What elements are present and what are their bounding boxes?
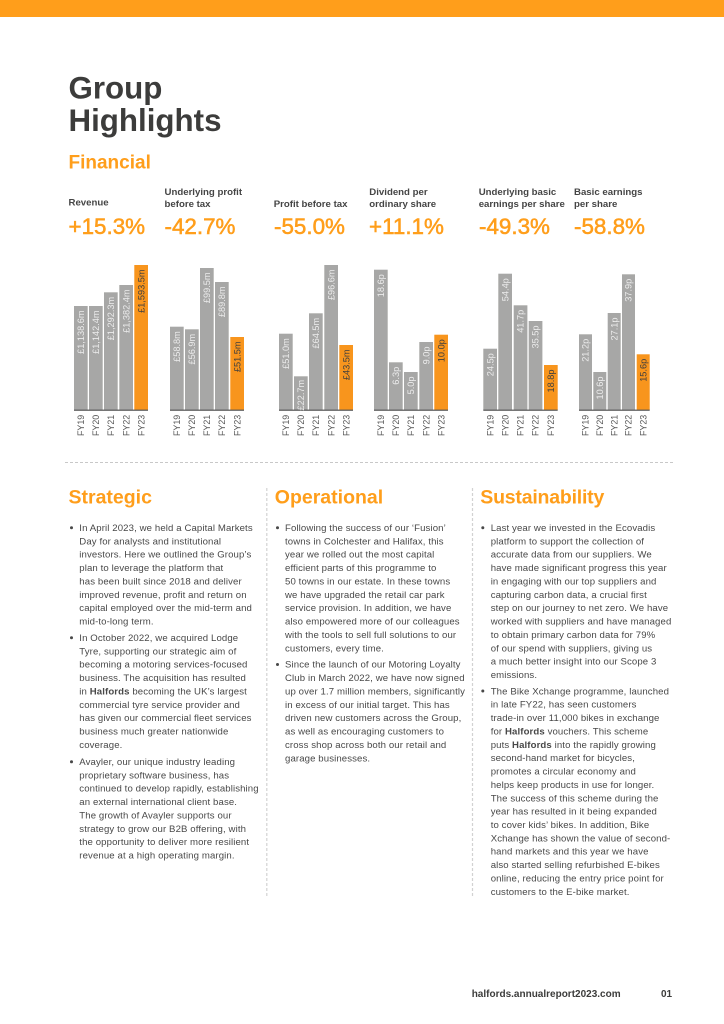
bullet: Ecovadis: accurate data from our suppliers. We <box>491 550 652 561</box>
footer URL: halfords.annualreport2023.com <box>472 989 621 1000</box>
bullet: Capital Markets Day <box>70 523 253 628</box>
metric: Revenue: Revenue <box>68 198 109 209</box>
bullet: Avayler: revenue at a high operating margin. <box>79 851 235 862</box>
bullet: Lodge Tyre: in Halfords becoming the UK’s largest <box>79 686 247 697</box>
bar chart: Dividend per ordinary share: 5.0p <box>406 376 416 394</box>
metric: Underlying basic earnings per share: -49.3% <box>479 214 550 239</box>
bar chart: Underlying profit before tax: FY19 <box>172 415 182 436</box>
bullet: Ecovadis: Last year we invested in the Ecovadis <box>491 523 655 534</box>
bullet: Fusion towns: 50 towns in our estate. In these towns <box>285 576 450 587</box>
metric: Underlying basic earnings per share: earnings per share <box>479 199 565 210</box>
bullet: Bike Xchange: trade-in over 11,000 bikes in exchange <box>491 713 660 724</box>
bar chart: Underlying profit before tax: FY23 <box>232 415 242 436</box>
bullet: Bike Xchange <box>481 686 670 898</box>
bar chart: Underlying basic earnings per share: 24.5p <box>485 353 495 376</box>
bullet: Bike Xchange: helps keep products in use for longer. <box>491 780 654 791</box>
bullet: Bike Xchange: The success of this scheme during the <box>491 793 658 804</box>
bullet: Lodge Tyre: has given our commercial fleet services <box>79 713 252 724</box>
bar chart: Dividend per ordinary share: FY20 <box>391 415 401 436</box>
bar chart: Underlying basic earnings per share: FY23 <box>546 415 556 436</box>
bullet: Fusion towns: customers, every time. <box>285 643 384 654</box>
bar chart: Revenue: FY20 <box>91 415 101 436</box>
bullet: Lodge Tyre: becoming a motoring services-focused <box>79 660 248 671</box>
bullet: Ecovadis: step on our journey to net zero. We have <box>491 603 668 614</box>
bullet: Fusion towns: service provision. In addition, we have <box>285 603 451 614</box>
bullet: Bike Xchange: hand markets and this year we have <box>491 847 649 858</box>
bullet: Ecovadis: a much better insight into our Scope 3 <box>491 657 656 668</box>
bullet: Avayler: the opportunity to deliver more resilient <box>79 837 249 848</box>
bar chart: Basic earnings per share: 27.1p <box>609 318 619 340</box>
bar chart: Profit before tax: FY22 <box>326 415 336 436</box>
bullet: Bike Xchange: second-hand market for bicycles, <box>491 753 635 764</box>
metric: Revenue: +15.3% <box>68 214 145 239</box>
bullet: Ecovadis: in engaging with our top suppliers and <box>491 576 656 587</box>
bullet: Bike Xchange: also started selling refurbished E-bikes <box>491 860 660 871</box>
heading: Sustainability: Sustainability <box>480 486 604 508</box>
bullet: Bike Xchange: online, reducing the entry price point for <box>491 873 665 884</box>
bullet: Fusion towns: towns in Colchester and Halifax, this <box>285 536 444 547</box>
bullet: Ecovadis: have made significant progress this year <box>491 563 668 574</box>
bar chart: Underlying basic earnings per share: FY19 <box>485 415 495 436</box>
title: Highlights <box>68 103 222 138</box>
bullet: Ecovadis: to obtain primary carbon data for 79% <box>491 630 656 641</box>
page number: 01 <box>661 989 673 1000</box>
bar chart: Underlying basic earnings per share: FY21 <box>516 415 526 436</box>
bullet: Avayler: an external international client base. <box>79 797 237 808</box>
bar chart: Basic earnings per share: FY20 <box>595 415 605 436</box>
metric: Profit before tax: -55.0% <box>274 214 345 239</box>
bullet: Ecovadis: emissions. <box>491 670 537 681</box>
bullet: Motoring Loyalty Club: up over 1.7 million members, significantly <box>285 686 465 697</box>
metric: Underlying profit before tax: -42.7% <box>164 214 236 239</box>
bar chart: Profit before tax: FY23 <box>341 415 351 436</box>
bullet: Ecovadis: capturing carbon data, a crucial first <box>491 590 647 601</box>
bullet: Lodge Tyre: coverage. <box>79 740 122 751</box>
bar chart: Revenue: £1,292.3m <box>106 296 116 340</box>
bullet: Bike Xchange: year has resulted in it being expanded <box>491 807 657 818</box>
bar chart: Profit before tax: FY21 <box>311 415 321 436</box>
bullet: Motoring Loyalty Club: cross shop across both our retail and <box>285 740 446 751</box>
bar chart: Underlying profit before tax: FY20 <box>187 415 197 436</box>
bar chart: Revenue: £1,593.5m <box>136 269 146 313</box>
bar chart: Dividend per ordinary share: 10.0p <box>436 339 446 362</box>
bullet: Motoring Loyalty Club: Club in March 2022, we have now signed <box>285 673 465 684</box>
bar chart: Basic earnings per share <box>579 274 650 436</box>
bar chart: Profit before tax: £96.6m <box>326 269 336 300</box>
bullet: Capital Markets Day: capital employed over the mid-term and <box>79 603 252 614</box>
bullet: Capital Markets Day: mid-to-long term. <box>79 617 154 628</box>
panel: Operational <box>275 486 465 764</box>
bullet: Bike Xchange: to cover kids’ bikes. In addition, Bike <box>491 820 649 831</box>
bar chart: Basic earnings per share: 21.2p <box>581 339 591 362</box>
metric: Basic earnings per share: -58.8% <box>574 214 645 239</box>
bullet: Motoring Loyalty Club <box>276 660 465 764</box>
bar chart: Revenue: FY21 <box>106 415 116 436</box>
bullet: Lodge Tyre: commercial tyre service provider and <box>79 700 240 711</box>
bar chart: Dividend per ordinary share <box>374 270 448 436</box>
bar chart: Underlying basic earnings per share: 35.5p <box>531 326 541 348</box>
bullet: Fusion towns: efficient parts of this programme to <box>285 563 436 574</box>
bullet: Fusion towns <box>276 523 460 654</box>
bar chart: Basic earnings per share: FY19 <box>581 415 591 436</box>
bullet: Capital Markets Day: plan to leverage the platform that <box>79 563 224 574</box>
title: Group <box>68 70 162 106</box>
bullet: Bike Xchange: promotes a circular economy and <box>491 767 636 778</box>
bar chart: Revenue: £1,138.6m <box>76 310 86 354</box>
bullet: Avayler <box>70 757 259 862</box>
metric: Profit before tax: Profit before tax <box>274 199 348 210</box>
bullet: Lodge Tyre: In October 2022, we acquired Lodge <box>79 633 238 644</box>
bar chart: Underlying profit before tax: £56.9m <box>187 333 197 364</box>
bullet: Capital Markets Day: has been built since 2018 and deliver <box>79 576 242 587</box>
bullet: Fusion towns: Following the success of our ‘Fusion’ <box>285 523 446 534</box>
bullet: Ecovadis <box>481 523 671 681</box>
panel: Sustainability <box>480 486 671 898</box>
metric: Dividend per ordinary share: ordinary share <box>369 199 437 210</box>
top orange band <box>0 0 724 17</box>
bar chart: Dividend per ordinary share: FY21 <box>406 415 416 436</box>
bar chart: Underlying basic earnings per share: 54.4p <box>500 278 510 301</box>
bullet: Ecovadis: worked with suppliers and have managed <box>490 617 671 628</box>
bar chart: Underlying profit before tax: FY22 <box>217 415 227 436</box>
bullet: Lodge Tyre: business much greater nationwide <box>79 727 228 738</box>
bar chart: Underlying basic earnings per share: FY22 <box>531 415 541 436</box>
bar chart: Profit before tax <box>279 265 353 436</box>
bar chart: Underlying basic earnings per share: 41.7p <box>516 310 526 333</box>
bar chart: Dividend per ordinary share: 9.0p <box>421 346 431 364</box>
heading: Operational: Operational <box>275 486 383 508</box>
bar chart: Basic earnings per share: FY22 <box>624 415 634 436</box>
bullet: Ecovadis: platform to support the collection of <box>491 536 644 547</box>
bar chart: Underlying profit before tax: £89.8m <box>217 286 227 317</box>
metric: Basic earnings per share: per share <box>574 199 618 210</box>
bar chart: Revenue: FY22 <box>121 415 131 436</box>
bullet: Capital Markets Day: Day for analysts and institutional <box>79 536 221 547</box>
bar chart: Basic earnings per share: 10.6p <box>595 376 605 400</box>
bullet: Bike Xchange: Xchange has shown the value of second- <box>491 833 670 844</box>
bullet: Bike Xchange: The Bike Xchange programme, launched <box>491 686 669 697</box>
metric: Profit before tax <box>274 199 348 239</box>
heading: Financial: Financial <box>68 153 151 174</box>
bar chart: Basic earnings per share: 37.9p <box>624 279 634 302</box>
bullet: Capital Markets Day: In April 2023, we held a Capital Markets <box>79 523 253 534</box>
metric: Dividend per ordinary share: +11.1% <box>369 214 444 239</box>
bar chart: Basic earnings per share: FY23 <box>638 415 648 436</box>
bar chart: Dividend per ordinary share: FY19 <box>376 415 386 436</box>
metric: Underlying profit before tax: Underlying profit <box>164 187 243 198</box>
heading: Strategic: Strategic <box>68 486 152 508</box>
metric: Underlying basic earnings per share <box>479 187 565 239</box>
bullet: Bike Xchange: in late FY22, has seen customers <box>491 700 637 711</box>
bullet: Capital Markets Day: improved revenue, profit and return on <box>79 590 247 601</box>
bullet: Capital Markets Day: investors. Here we outlined the Group’s <box>79 550 251 561</box>
bar chart: Profit before tax: FY19 <box>281 415 291 436</box>
bar chart: Revenue: £1,142.4m <box>91 310 101 354</box>
bullet: Motoring Loyalty Club: as well as encouraging customers to <box>285 727 444 738</box>
bullet: Lodge Tyre <box>70 633 252 751</box>
bar chart: Profit before tax: £22.7m <box>296 379 306 410</box>
bar chart: Dividend per ordinary share: 18.6p <box>376 274 386 297</box>
bar chart: Basic earnings per share: 15.6p <box>638 359 648 382</box>
bar chart: Revenue <box>74 265 148 436</box>
bullet: Bike Xchange: customers to the E-bike market. <box>491 887 630 898</box>
bullet: Avayler: strategy to grow our B2B offering, with <box>79 824 246 835</box>
bullet: Fusion towns: also empowered more of our colleagues <box>285 617 460 628</box>
bullet: Lodge Tyre: Tyre, supporting our strategic aim of <box>79 646 237 657</box>
bar chart: Underlying basic earnings per share: FY20 <box>500 415 510 436</box>
bar chart: Underlying profit before tax <box>170 268 244 436</box>
bar chart: Revenue: £1,382.4m <box>121 289 131 333</box>
bar chart: Profit before tax: £43.5m <box>341 349 351 380</box>
metric: Basic earnings per share <box>574 187 645 239</box>
bullet: Avayler: The growth of Avayler supports our <box>79 810 232 821</box>
bullet: Motoring Loyalty Club: in excess of our initial target. This has <box>285 700 450 711</box>
metric: Revenue <box>68 198 145 239</box>
bullet: Motoring Loyalty Club: Since the launch of our Motoring Loyalty <box>285 660 461 671</box>
bullet: Lodge Tyre: business. The acquisition has resulted <box>79 673 246 684</box>
bullet: Avayler: continued to develop rapidly, establishing <box>79 784 259 795</box>
bar chart: Underlying profit before tax: £58.8m <box>172 331 182 362</box>
bar chart: Dividend per ordinary share: 6.3p <box>391 367 401 385</box>
bar chart: Basic earnings per share: FY21 <box>609 415 619 436</box>
bar chart: Revenue: FY23 <box>136 415 146 436</box>
bar chart: Underlying profit before tax: FY21 <box>202 415 212 436</box>
metric: Underlying profit before tax: before tax <box>164 199 211 210</box>
bullet: Motoring Loyalty Club: garage businesses. <box>285 753 370 764</box>
bar chart: Underlying basic earnings per share: 18.8p <box>546 370 556 392</box>
bullet: Fusion towns: we have upgraded the retail car park <box>284 590 445 601</box>
bullet: Bike Xchange: for Halfords vouchers. This scheme <box>491 726 648 737</box>
metric: Dividend per ordinary share: Dividend per <box>369 187 428 198</box>
bar chart: Profit before tax: FY20 <box>296 415 306 436</box>
bar chart: Profit before tax: £51.0m <box>281 338 291 369</box>
bullet: Bike Xchange: puts Halfords into the rapidly growing <box>491 740 656 751</box>
bullet: Fusion towns: year we rolled out the most capital <box>285 550 434 561</box>
bar chart: Underlying basic earnings per share <box>483 274 558 436</box>
metric: Underlying basic earnings per share: Underlying basic <box>479 187 557 198</box>
bullet: Motoring Loyalty Club: driven new customers across the Group, <box>285 713 461 724</box>
bar chart: Dividend per ordinary share: FY22 <box>421 415 431 436</box>
bar chart: Dividend per ordinary share: FY23 <box>436 415 446 436</box>
bullet: Avayler: Avayler, our unique industry leading <box>79 757 235 768</box>
bar chart: Revenue: FY19 <box>76 415 86 436</box>
bar chart: Profit before tax: £64.5m <box>311 317 321 348</box>
bullet: Ecovadis: of our spend with suppliers, giving us <box>491 643 652 654</box>
bullet: Fusion towns: with the tools to sell full solutions to our <box>284 630 457 641</box>
metric: Underlying profit before tax <box>164 187 243 239</box>
bullet: Avayler: proprietary software business, has <box>79 770 229 781</box>
panel: Strategic <box>68 486 259 862</box>
bar chart: Underlying profit before tax: £99.5m <box>202 272 212 303</box>
metric: Basic earnings per share: Basic earnings <box>574 187 642 198</box>
bar chart: Underlying profit before tax: £51.5m <box>232 341 242 372</box>
metric: Dividend per ordinary share <box>369 187 444 239</box>
